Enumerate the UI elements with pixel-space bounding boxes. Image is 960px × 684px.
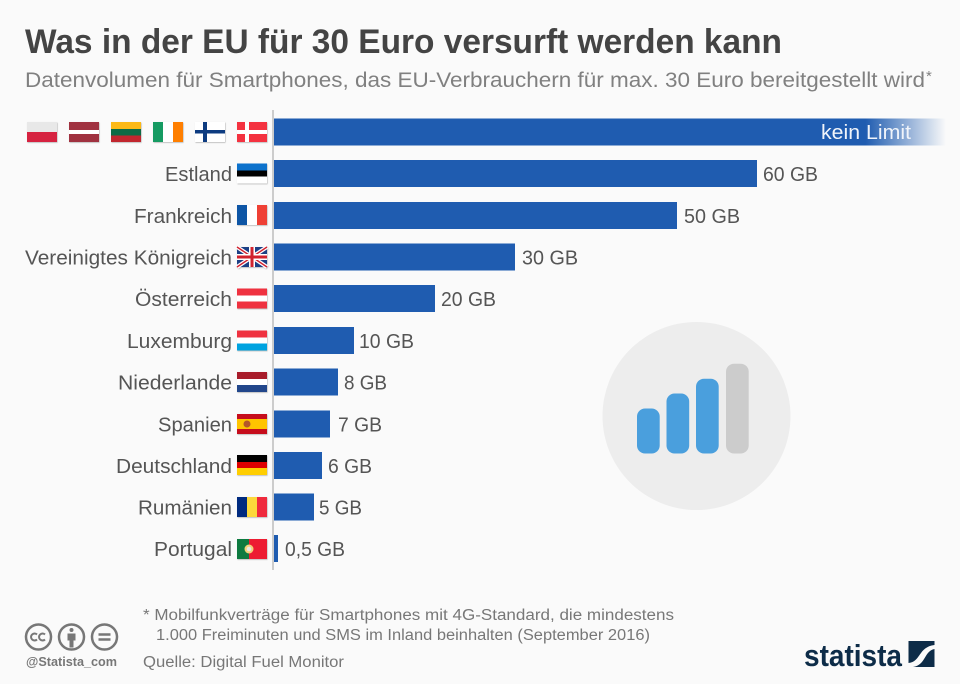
row: Frankreich (134, 202, 740, 229)
footnote: * Mobilfunkverträge für Smartphones mit 4G-Standard, die mindestens (143, 607, 674, 624)
subtitle asterisk: * (926, 68, 932, 85)
axis line (272, 110, 274, 570)
row: Frankreich: 50 GB (684, 206, 740, 228)
row: Estland: Estland (165, 164, 232, 186)
row: Estland (165, 160, 818, 187)
flag: Polen (27, 122, 57, 142)
subtitle: Datenvolumen für Smartphones, das EU-Verbrauchern für max. 30 Euro bereitgestellt wird (25, 68, 925, 92)
flag: Lettland (69, 122, 99, 142)
row: Vereinigtes Königreich (25, 244, 578, 270)
title: Was in der EU für 30 Euro versurft werden kann (25, 23, 782, 61)
row: Vereinigtes Königreich: Vereinigtes Königreich (25, 248, 232, 270)
row: Rumänien: Rumänien (138, 498, 232, 520)
row: Österreich: 20 GB (441, 289, 496, 311)
row: Portugal: 0,5 GB (285, 539, 345, 561)
footnote (143, 607, 674, 644)
row: Spanien (158, 410, 382, 438)
row: Deutschland: 6 GB (328, 456, 372, 478)
flag: Dänemark (237, 122, 267, 142)
source: Quelle: Digital Fuel Monitor (143, 654, 344, 671)
row: Deutschland: Deutschland (116, 456, 232, 478)
row: Rumänien (138, 494, 362, 520)
icons: Creative Commons licence (26, 624, 117, 650)
icon: statista mark (908, 641, 934, 667)
row: Luxemburg: Luxemburg (127, 331, 232, 353)
row: Niederlande: 8 GB (344, 372, 387, 394)
value: kein Limit: kein Limit (821, 122, 911, 144)
row: Österreich: Österreich (135, 289, 232, 311)
statista logo: statista (804, 638, 903, 673)
row: Spanien: 7 GB (338, 414, 382, 436)
row: Rumänien: 5 GB (319, 498, 362, 520)
footnote: 1.000 Freiminuten und SMS im Inland beinhalten (September 2016) (156, 627, 650, 644)
row: Luxemburg: 10 GB (359, 331, 414, 353)
row: Deutschland (116, 452, 372, 479)
flag: Litauen (111, 122, 141, 142)
row: Portugal: Portugal (154, 539, 232, 561)
handle: @Statista_com (26, 655, 117, 669)
row: Frankreich: Frankreich (134, 206, 232, 228)
row: kein Limit (27, 118, 946, 146)
row: Österreich (135, 285, 496, 312)
row: Spanien: Spanien (158, 414, 232, 436)
flag: Finnland (195, 122, 225, 142)
row: Luxemburg (127, 327, 414, 354)
row: Vereinigtes Königreich: 30 GB (522, 248, 578, 270)
icon: signal strength (602, 322, 790, 510)
row: Portugal (154, 535, 345, 562)
row: Niederlande (118, 368, 387, 396)
bar: kein Limit (274, 118, 946, 146)
row: Estland: 60 GB (763, 164, 818, 186)
flag: Irland (153, 122, 183, 142)
row: Niederlande: Niederlande (118, 372, 232, 394)
